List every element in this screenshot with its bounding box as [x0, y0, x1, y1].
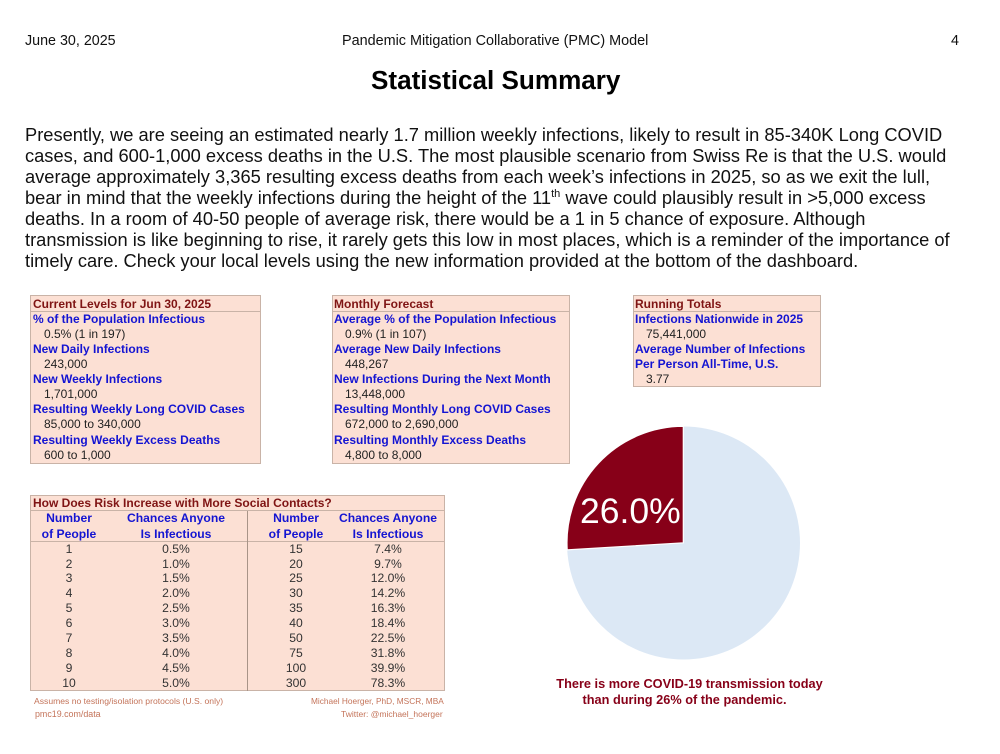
nationwide value: 75,441,000 — [646, 327, 706, 341]
table rows: 18.4% — [371, 616, 405, 630]
panel: monthly forecast — [332, 295, 570, 464]
weekly infections label: New Weekly Infections — [33, 372, 162, 386]
daily infections value: 243,000 — [44, 357, 87, 371]
table rows: 30 — [289, 586, 303, 600]
summary text block: cases, and 600-1,000 excess deaths in the U.S. The most plausible scenario from Swiss Re is that the U.S. would — [25, 145, 946, 166]
monthly long covid label: Resulting Monthly Long COVID Cases — [334, 402, 551, 416]
table rows: 2 — [66, 557, 72, 571]
table rows: 15 — [289, 542, 303, 556]
table rows: 16.3% — [371, 601, 405, 615]
long covid label: Resulting Weekly Long COVID Cases — [33, 402, 245, 416]
column headers: Number — [46, 511, 92, 525]
running totals heading: Running Totals — [635, 297, 721, 311]
next month label: New Infections During the Next Month — [334, 372, 551, 386]
table rows: 0.5% — [162, 542, 190, 556]
column headers: Is Infectious — [141, 526, 211, 540]
page number: 4 — [951, 33, 959, 49]
table rows: 4.0% — [162, 646, 190, 660]
table rows: 10 — [62, 676, 76, 690]
table rows: 20 — [289, 557, 303, 571]
table rows: 100 — [286, 661, 306, 675]
average percent value: 0.9% (1 in 107) — [345, 327, 426, 341]
percent infectious label: % of the Population Infectious — [33, 312, 205, 326]
weekly infections value: 1,701,000 — [44, 387, 97, 401]
table rows: 25 — [289, 571, 303, 585]
summary text block: deaths. In a room of 40-50 people of average risk, there would be a 1 in 5 chance of exposure. Although — [25, 208, 865, 229]
monthly long covid value: 672,000 to 2,690,000 — [345, 417, 458, 431]
table rows: 7.4% — [374, 542, 402, 556]
column headers: Chances Anyone — [127, 511, 225, 525]
column headers: of People — [269, 526, 323, 540]
pie chart — [567, 426, 800, 660]
table rows: 35 — [289, 601, 303, 615]
table rows: 7 — [66, 631, 72, 645]
table rows: 1.0% — [162, 557, 190, 571]
table rows: 39.9% — [371, 661, 405, 675]
long covid value: 85,000 to 340,000 — [44, 417, 141, 431]
excess deaths value: 600 to 1,000 — [44, 448, 111, 462]
table rows: 6 — [66, 616, 72, 630]
table rows: 3.0% — [162, 616, 190, 630]
excess deaths label: Resulting Weekly Excess Deaths — [33, 433, 220, 447]
page header model name: Pandemic Mitigation Collaborative (PMC) Model — [342, 33, 648, 49]
percent infectious value: 0.5% (1 in 197) — [44, 327, 125, 341]
per person value: 3.77 — [646, 372, 669, 386]
column headers: Number — [273, 511, 319, 525]
per person label second line: Per Person All-Time, U.S. — [635, 357, 778, 371]
table rows: 300 — [286, 676, 306, 690]
next month value: 13,448,000 — [345, 387, 405, 401]
table rows: 4 — [66, 586, 72, 600]
table rows: 78.3% — [371, 676, 405, 690]
table rows: 3.5% — [162, 631, 190, 645]
table rows: 1 — [66, 542, 72, 556]
table rows: 9.7% — [374, 557, 402, 571]
summary text block: average approximately 3,365 resulting excess deaths from each week’s infections in 2025, so as we exit the lull, — [25, 166, 930, 187]
column headers: Chances Anyone — [339, 511, 437, 525]
table rows: 14.2% — [371, 586, 405, 600]
summary text block — [25, 124, 950, 271]
column headers: Is Infectious — [353, 526, 423, 540]
table rows: 50 — [289, 631, 303, 645]
daily infections label: New Daily Infections — [33, 342, 150, 356]
table rows: 5 — [66, 601, 72, 615]
summary text block: Presently, we are seeing an estimated nearly 1.7 million weekly infections, likely to result in 85-340K Long COVID — [25, 124, 942, 145]
table rows: 4.5% — [162, 661, 190, 675]
table rows: 3 — [66, 571, 72, 585]
table rows: 40 — [289, 616, 303, 630]
average daily label: Average New Daily Infections — [334, 342, 501, 356]
footnote: author: Michael Hoerger, PhD, MSCR, MBA — [311, 696, 444, 706]
per person label: Average Number of Infections — [635, 342, 805, 356]
panel: running totals — [633, 295, 821, 387]
table rows: 2.5% — [162, 601, 190, 615]
summary text block: transmission is like beginning to rise, it rarely gets this low in most places, which is a reminder of the importance of — [25, 229, 950, 250]
summary text block: bear in mind that the weekly infections during the height of the 11th wave could plausibly result in >5,000 excess — [25, 187, 926, 208]
table rows: 22.5% — [371, 631, 405, 645]
pie chart caption: There is more COVID-19 transmission today — [556, 676, 823, 691]
footnote: source link: pmc19.com/data — [35, 709, 101, 719]
footnote: assumptions: Assumes no testing/isolation protocols (U.S. only) — [34, 696, 223, 706]
table rows: 8 — [66, 646, 72, 660]
pie chart caption: than during 26% of the pandemic. — [582, 692, 787, 707]
page header date: June 30, 2025 — [25, 33, 116, 49]
average percent label: Average % of the Population Infectious — [334, 312, 556, 326]
panel: risk table — [30, 495, 445, 691]
table rows: 1.5% — [162, 571, 190, 585]
table rows: 9 — [66, 661, 72, 675]
table rows: 2.0% — [162, 586, 190, 600]
nationwide label: Infections Nationwide in 2025 — [635, 312, 803, 326]
column headers — [42, 511, 437, 540]
monthly deaths label: Resulting Monthly Excess Deaths — [334, 433, 526, 447]
table rows: 12.0% — [371, 571, 405, 585]
monthly forecast heading: Monthly Forecast — [334, 297, 433, 311]
table rows: 5.0% — [162, 676, 190, 690]
table rows: 75 — [289, 646, 303, 660]
monthly deaths value: 4,800 to 8,000 — [345, 448, 422, 462]
summary text block: timely care. Check your local levels using the new information provided at the bottom of the dashboard. — [25, 250, 858, 271]
table rows: 31.8% — [371, 646, 405, 660]
pie chart: 26.0% — [580, 491, 681, 531]
footnote: twitter: Twitter: @michael_hoerger — [341, 709, 443, 719]
average daily value: 448,267 — [345, 357, 388, 371]
title: Statistical Summary — [371, 65, 620, 95]
risk table heading: How Does Risk Increase with More Social Contacts? — [33, 496, 332, 510]
column headers: of People — [42, 526, 96, 540]
table rows — [62, 542, 405, 690]
current levels heading: Current Levels for Jun 30, 2025 — [33, 297, 211, 311]
pie chart caption — [556, 676, 823, 707]
panel: current levels — [30, 295, 261, 464]
